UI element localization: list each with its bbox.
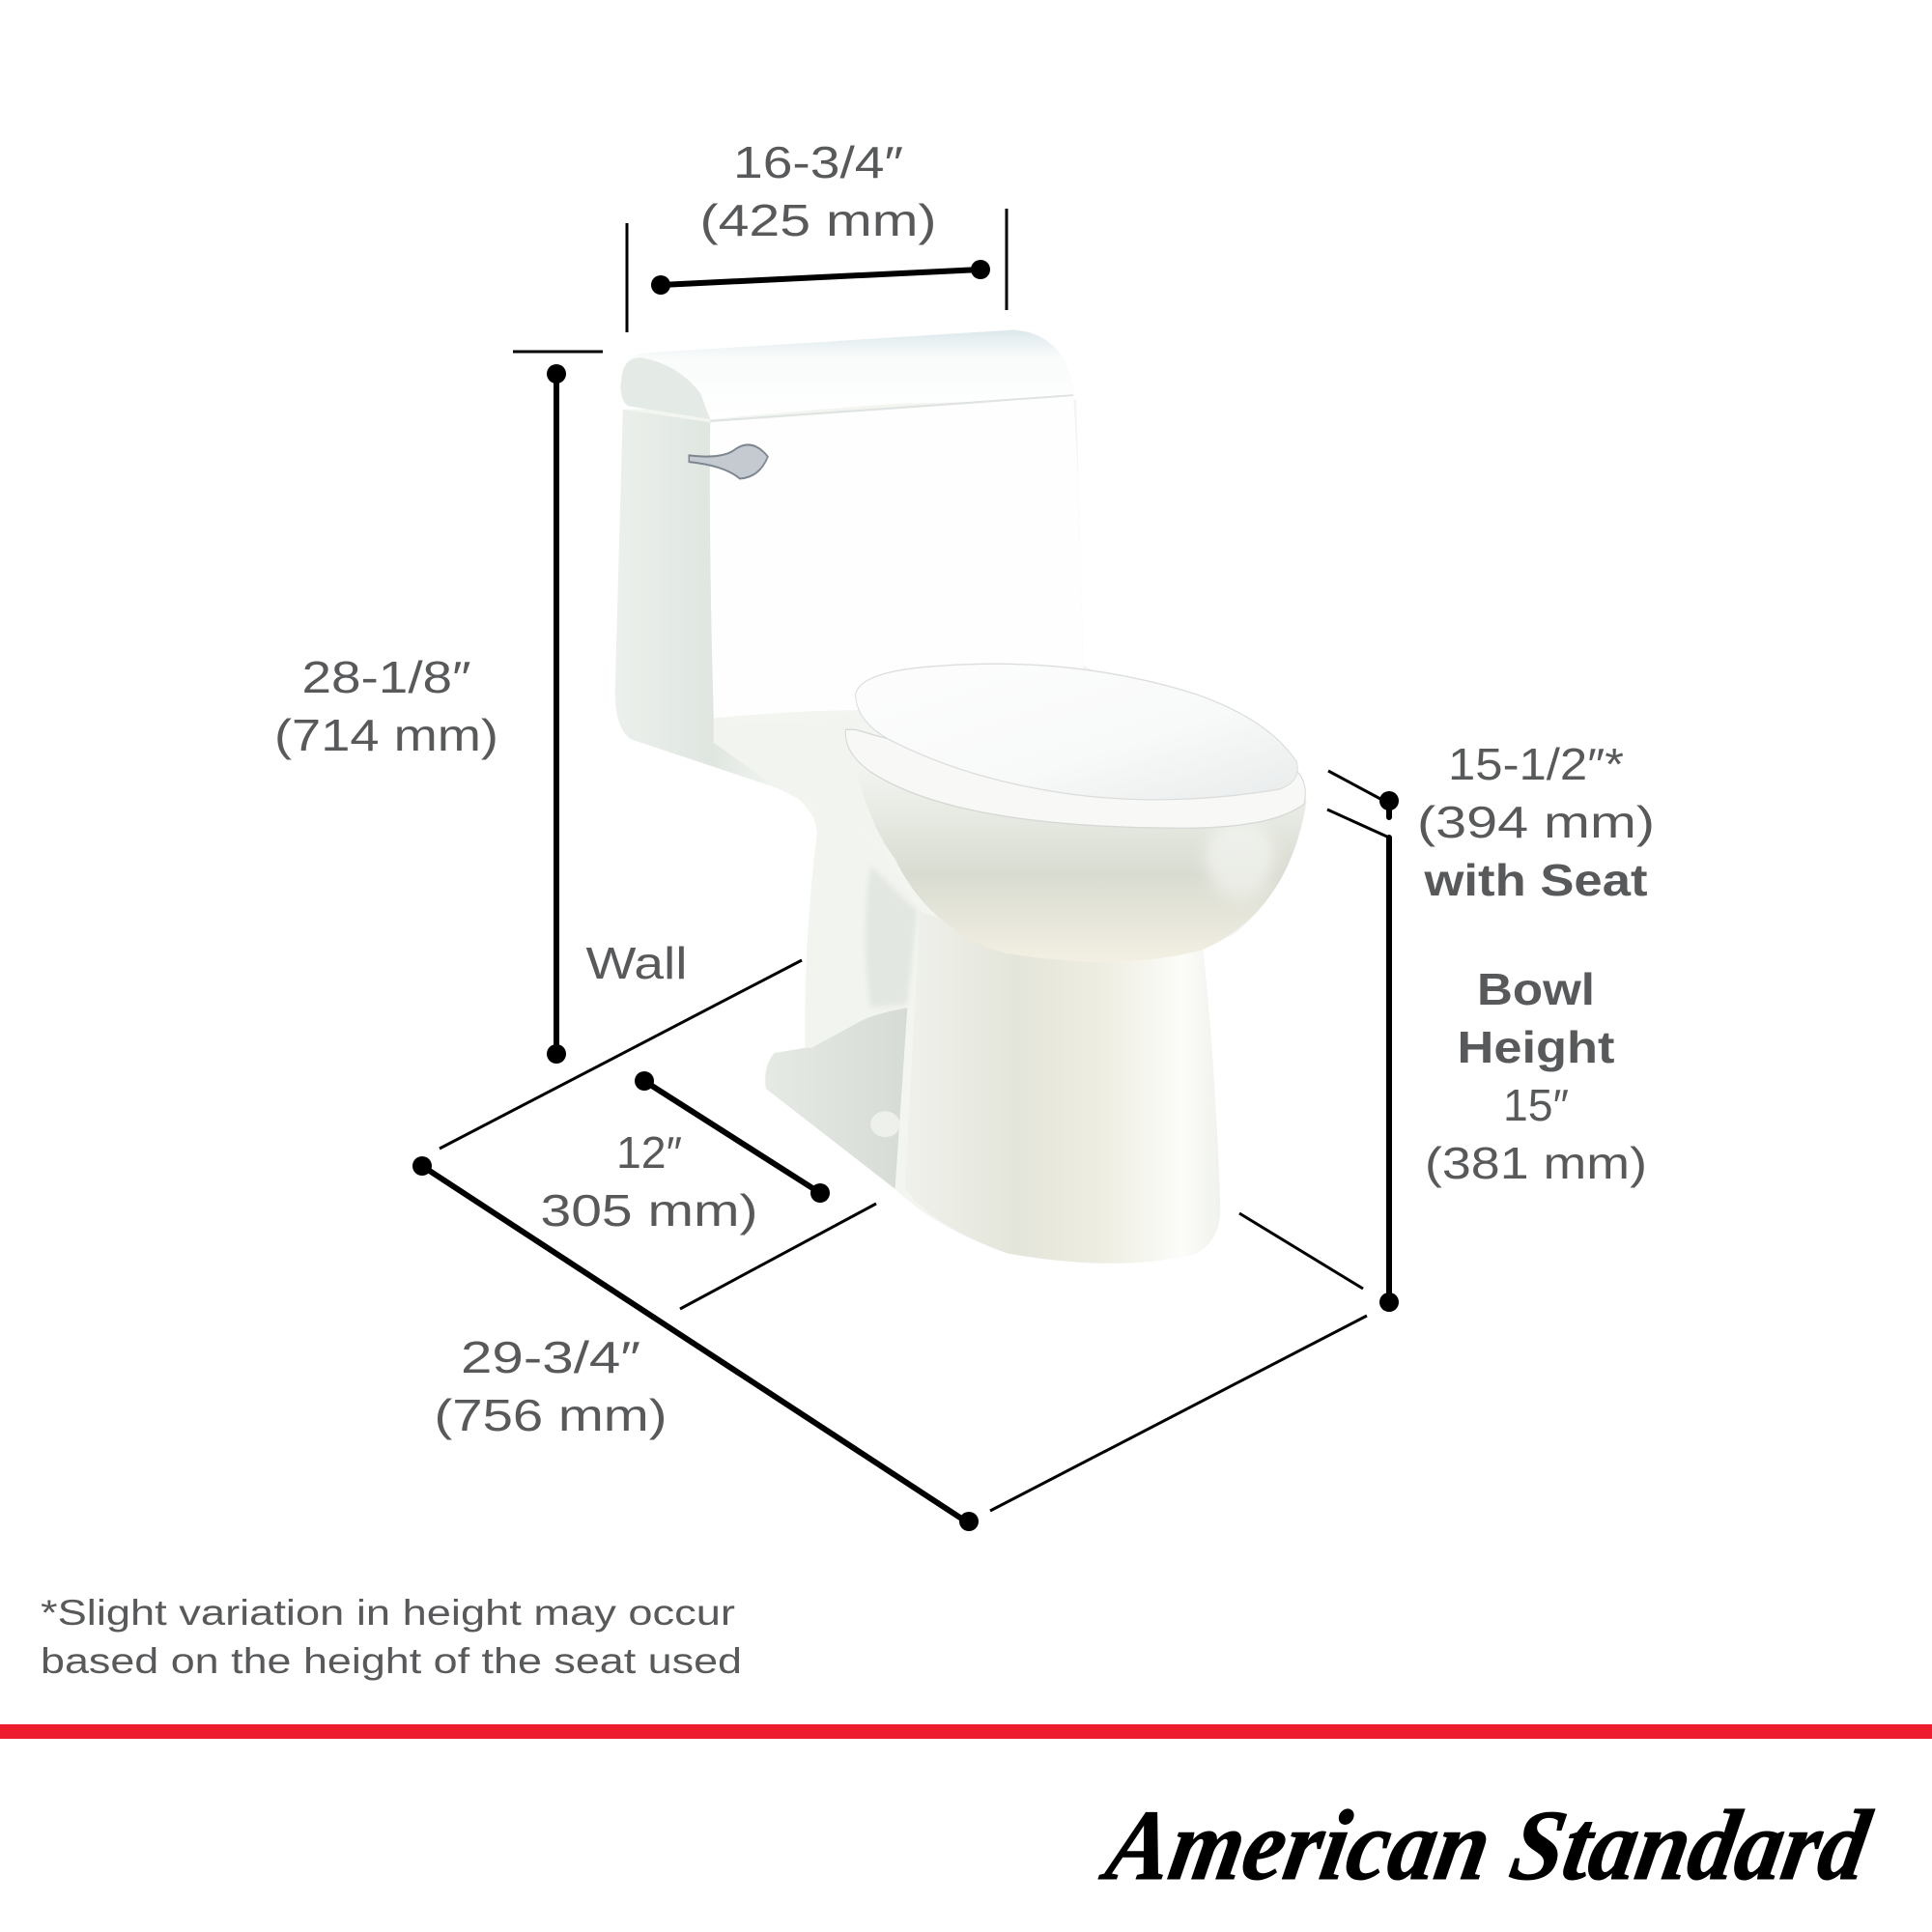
footnote: *Slight variation in height may occur bbox=[41, 1593, 735, 1633]
logo: American Standard: American Standard bbox=[1094, 1790, 1879, 1901]
tank front bbox=[710, 396, 1083, 718]
toilet illustration bbox=[615, 330, 1307, 1264]
dimension: bowl height: with Seat bbox=[1423, 855, 1648, 905]
footnote: based on the height of the seat used bbox=[41, 1641, 742, 1681]
dimension: bowl height: (394 mm) bbox=[1417, 797, 1655, 847]
tank side bbox=[615, 410, 777, 788]
dimension: tank width: (425 mm) bbox=[699, 195, 937, 245]
trapway shadow bbox=[866, 866, 917, 1008]
dimension: bowl height bbox=[1327, 739, 1655, 1312]
dimension: total height bbox=[274, 352, 603, 1064]
footnote bbox=[41, 1593, 742, 1681]
seat lid bbox=[856, 664, 1297, 800]
floor flange bbox=[765, 1008, 907, 1189]
dimension: bowl height: (381 mm) bbox=[1425, 1138, 1647, 1188]
dimension: tank width bbox=[627, 137, 1007, 332]
dimension: total depth bbox=[412, 1156, 1367, 1531]
dimension: bowl height: Bowl bbox=[1477, 964, 1595, 1014]
rim bbox=[845, 729, 1305, 828]
flush handle bbox=[689, 444, 768, 479]
dimension: total depth: (756 mm) bbox=[435, 1390, 667, 1440]
lid seam bbox=[710, 395, 1073, 421]
lid end shading bbox=[620, 357, 710, 419]
dimension: total depth: 29-3/4″ bbox=[461, 1332, 640, 1382]
dimension: tank width: 16-3/4″ bbox=[733, 137, 903, 187]
dimension: bowl height: 15″ bbox=[1503, 1080, 1569, 1130]
bowl highlight bbox=[1206, 820, 1274, 897]
wall label: Wall bbox=[585, 938, 688, 988]
pedestal bbox=[905, 911, 1220, 1264]
dimension: total height: 28-1/8″ bbox=[301, 652, 471, 702]
bolt cap bbox=[870, 1111, 900, 1137]
toilet body silhouette bbox=[615, 400, 1307, 1264]
dimension: bowl height: 15-1/2″* bbox=[1448, 739, 1624, 789]
tank ledge bbox=[714, 714, 885, 846]
red divider bar bbox=[0, 1724, 1932, 1739]
dimension: bowl height: Height bbox=[1457, 1022, 1615, 1072]
dimension: total height: (714 mm) bbox=[274, 710, 498, 760]
dimension: rough-in: 305 mm) bbox=[541, 1185, 757, 1236]
dimension: rough-in bbox=[440, 960, 876, 1309]
tank lid bbox=[620, 330, 1075, 419]
bowl bbox=[856, 769, 1307, 962]
trapway bbox=[806, 801, 920, 1048]
dimension: rough-in: 12″ bbox=[616, 1127, 682, 1178]
